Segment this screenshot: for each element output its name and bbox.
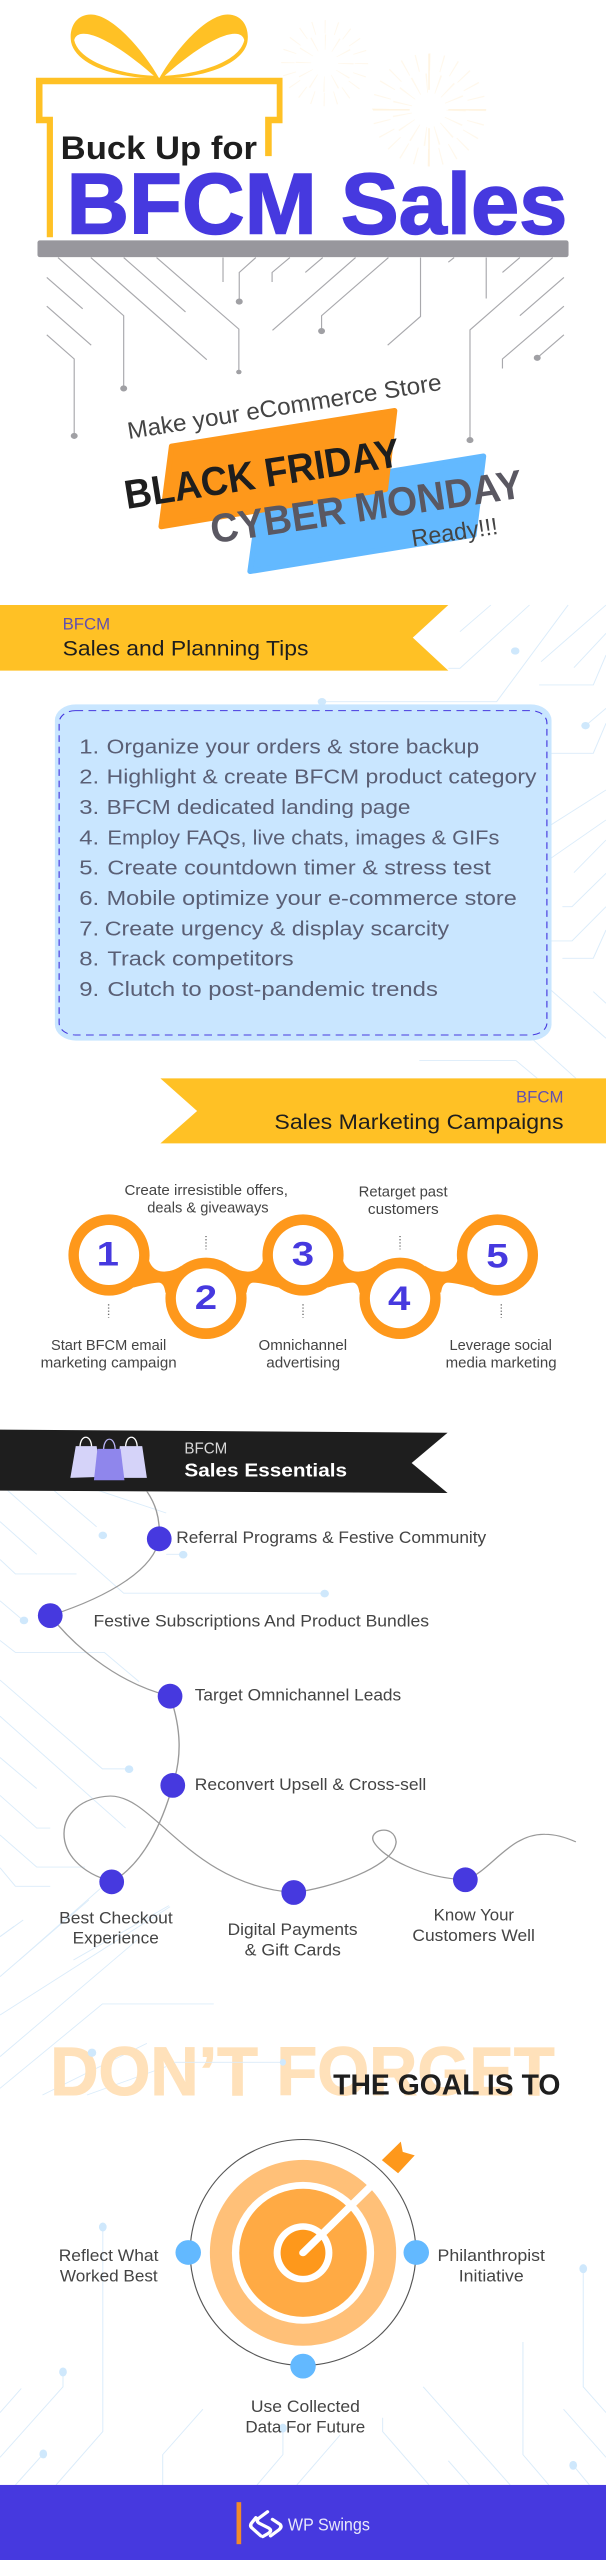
faint overlay lines and dot (88, 2049, 286, 2066)
banner label: BFCM (63, 615, 110, 633)
footer bar (0, 2485, 606, 2560)
icon: gift bow (71, 15, 248, 78)
tips list (79, 735, 537, 1001)
tips list: 1. (79, 735, 99, 758)
banner (160, 1078, 606, 1143)
step labels (41, 1182, 557, 1371)
orange tag (161, 411, 395, 527)
tips card (55, 704, 552, 1041)
step labels: marketing campaign (41, 1354, 177, 1371)
step labels: deals & giveaways (147, 1200, 269, 1216)
step labels: media marketing (446, 1354, 557, 1371)
background circuit (318, 605, 606, 1078)
tagline top: Make your eCommerce Store (125, 369, 443, 445)
banner (0, 605, 448, 671)
node labels: Reconvert Upsell & Cross-sell (195, 1775, 426, 1794)
section: sales marketing campaigns (41, 1078, 606, 1371)
banner label: BFCM (516, 1088, 564, 1106)
goal labels: Reflect What (59, 2246, 159, 2265)
tips list: 4. (79, 826, 99, 849)
background circuit (0, 1491, 329, 1960)
tips list: Create urgency & display scarcity (105, 917, 450, 940)
banner heading: Sales Essentials (184, 1460, 347, 1481)
tips list: Highlight & create BFCM product category (107, 765, 537, 788)
footer accent (237, 2502, 241, 2544)
winding path (50, 1491, 576, 1893)
banner heading: Sales and Planning Tips (63, 636, 308, 660)
tips list: 8. (79, 947, 99, 970)
banner heading: Sales Marketing Campaigns (274, 1110, 564, 1134)
cyber monday text: CYBER MONDAY (207, 461, 525, 552)
title line 1: Buck Up for (61, 130, 257, 166)
step labels: Omnichannel (259, 1337, 347, 1354)
title line 2: BFCM Sales (66, 156, 567, 252)
section: the goal (0, 2034, 606, 2560)
background circuit: left middle (0, 1900, 214, 2095)
hero section (36, 15, 569, 571)
tips list: 3. (79, 796, 99, 819)
step labels: advertising (266, 1354, 340, 1371)
step chain: 2 (195, 1278, 217, 1316)
step labels: Leverage social (449, 1337, 552, 1354)
node labels: Target Omnichannel Leads (195, 1686, 401, 1704)
step chain: 3 (292, 1234, 314, 1273)
node labels: Know Your (434, 1905, 514, 1924)
icon: target (190, 2140, 416, 2365)
blue nodes (175, 2240, 429, 2379)
step chain (68, 1214, 538, 1339)
blue tag (250, 456, 484, 571)
path nodes (38, 1526, 478, 1905)
ready text: Ready!!! (410, 513, 500, 552)
node labels: Experience (73, 1928, 159, 1947)
tips list: Mobile optimize your e-commerce store (107, 886, 517, 910)
goal labels: Philanthropist (438, 2246, 545, 2265)
tips list: 6. (79, 886, 99, 910)
goal labels (59, 2246, 545, 2436)
step chain: 4 (388, 1279, 411, 1317)
tips list: 7. (79, 917, 99, 940)
step labels: Retarget past (359, 1184, 448, 1200)
fireworks (288, 27, 486, 166)
node labels: Digital Payments (228, 1920, 358, 1939)
circuit lines (47, 258, 564, 443)
tips list: Employ FAQs, live chats, images & GIFs (107, 826, 499, 849)
tips list: Clutch to post-pandemic trends (107, 977, 438, 1001)
background circuit (0, 2223, 606, 2485)
tips list: BFCM dedicated landing page (107, 796, 410, 819)
icon: shopping bags (70, 1437, 147, 1480)
icon: gift box outline (36, 78, 283, 237)
node labels (59, 1528, 535, 1959)
tips list: 9. (79, 977, 99, 1001)
tips list: Create countdown timer & stress test (107, 856, 492, 879)
shelf bar (37, 240, 569, 257)
node labels: Referral Programs & Festive Community (176, 1528, 487, 1547)
goal labels: Worked Best (60, 2267, 158, 2286)
goal labels: Initiative (459, 2267, 524, 2286)
node labels: & Gift Cards (245, 1940, 341, 1959)
step labels: Create irresistible offers, (124, 1182, 288, 1199)
footer brand: WP Swings (288, 2515, 370, 2535)
icon: logo (251, 2512, 281, 2537)
section: sales essentials (0, 1430, 576, 1960)
goal labels: Data For Future (245, 2418, 365, 2436)
node labels: Festive Subscriptions And Product Bundles (94, 1612, 429, 1630)
banner (0, 1430, 448, 1493)
black friday text: BLACK FRIDAY (121, 430, 403, 518)
step chain: 1 (97, 1234, 119, 1273)
node labels: Customers Well (412, 1926, 535, 1945)
step labels: customers (368, 1201, 439, 1218)
step chain: 5 (486, 1236, 509, 1275)
tips list: 5. (79, 856, 99, 879)
step labels: Start BFCM email (51, 1337, 166, 1354)
banner label: BFCM (184, 1440, 227, 1457)
section: sales and planning tips (0, 605, 606, 1078)
dashed border (59, 711, 547, 1035)
tips list: 2. (79, 765, 99, 788)
node labels: Best Checkout (59, 1908, 173, 1927)
dotted connectors (109, 1236, 501, 1318)
goal labels: Use Collected (251, 2397, 360, 2416)
tips list: Track competitors (107, 947, 294, 970)
tips list: Organize your orders & store backup (107, 735, 479, 758)
heading: THE GOAL IS TO (333, 2070, 560, 2101)
